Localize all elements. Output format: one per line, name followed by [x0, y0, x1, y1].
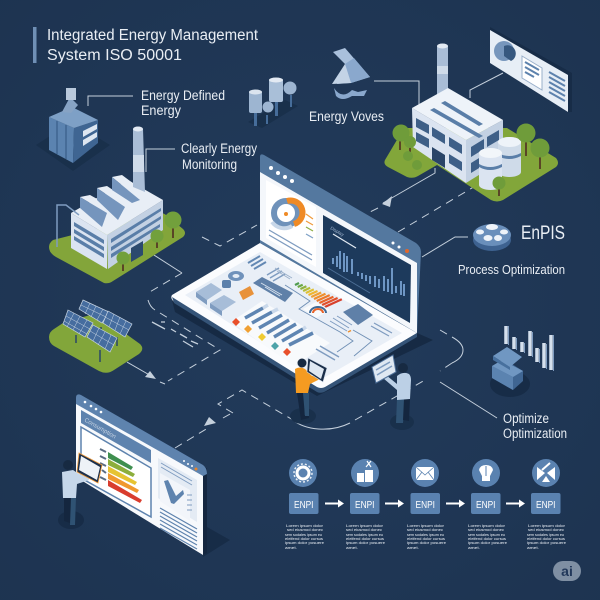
step captions: eleifend dolor cursus	[346, 536, 384, 541]
step captions: Lorem ipsum dolor	[286, 523, 324, 528]
label: clearly energy monitoring: Clearly Energy	[181, 141, 257, 156]
person: blue shirt	[372, 355, 414, 430]
laptop base	[171, 243, 417, 389]
icon: energy moves	[332, 48, 370, 99]
label: energy defined: Energy Defined	[141, 87, 225, 103]
efficiency bars	[108, 452, 142, 503]
step captions: eleifend dolor cursus	[527, 536, 565, 541]
step captions	[285, 523, 567, 550]
label: clearly energy monitoring	[181, 141, 257, 172]
step captions: Lorem ipsum dolor	[346, 523, 384, 528]
base widgets	[196, 256, 392, 366]
title: System ISO 50001	[47, 47, 182, 64]
illustration: solar array	[49, 300, 142, 373]
panel: energy rating screen: Consumption	[83, 418, 117, 440]
arrow 3	[446, 500, 465, 508]
person: orange shirt	[290, 358, 327, 424]
step captions: eleifend dolor cursus	[468, 536, 506, 541]
badge: ai	[553, 561, 581, 581]
rating chart	[81, 427, 151, 517]
step captions: amet.	[527, 545, 539, 550]
panel: gauge	[266, 180, 316, 267]
step captions: sed eiusmod donec	[468, 527, 504, 532]
badge: ai: ai	[561, 563, 573, 579]
label: energy defined	[141, 87, 225, 118]
mini gauge	[303, 302, 330, 318]
panel: dark bar chart	[323, 215, 411, 323]
step 2: ENPI	[355, 499, 374, 511]
icon: cylinders	[248, 78, 298, 128]
laptop dashboard	[171, 154, 433, 396]
spectrum bars	[295, 283, 342, 307]
step captions: ipsum dolor posuere	[285, 540, 325, 545]
step captions: ipsum dolor posuere	[407, 540, 447, 545]
illustration: office plant with tanks	[384, 44, 558, 202]
panel: floating report	[490, 27, 572, 112]
panel: energy rating screen	[76, 394, 230, 557]
step captions: amet.	[468, 545, 480, 550]
step 2	[350, 459, 380, 514]
step captions: eleifend dolor cursus	[407, 536, 445, 541]
step captions: sem sodales ipsum eu	[346, 532, 383, 537]
step 1	[289, 459, 318, 514]
laptop screen	[260, 154, 421, 333]
step 4	[471, 459, 500, 514]
step captions: Lorem ipsum dolor	[407, 523, 445, 528]
small card	[343, 304, 373, 325]
arrow 1	[325, 500, 344, 508]
title: Integrated Energy Management	[47, 27, 259, 44]
arrow 2	[385, 500, 404, 508]
step captions: ipsum dolor posuere	[346, 540, 386, 545]
circuit lines	[285, 285, 372, 356]
process: ENPI steps	[285, 459, 567, 550]
label: EnPIS: EnPIS	[521, 223, 565, 244]
window dots	[269, 166, 400, 248]
step captions: sed eiusmod donec	[407, 527, 443, 532]
side card	[158, 458, 197, 522]
step 3	[410, 459, 440, 514]
step captions: sed eiusmod donec	[346, 527, 382, 532]
label: clearly energy monitoring: Monitoring	[182, 157, 237, 172]
icon: small process glyphs	[152, 322, 198, 347]
label: energy voves: Energy Voves	[309, 108, 384, 124]
step captions: sem sodales ipsum eu	[407, 532, 444, 537]
label: energy defined: Energy	[141, 102, 181, 118]
step captions: amet.	[407, 545, 419, 550]
step captions: ipsum dolor posuere	[527, 540, 567, 545]
icon: blue building	[36, 88, 110, 171]
step captions: sed eiusmod donec	[528, 527, 564, 532]
label: EnPIS	[473, 223, 565, 251]
arrow 4	[506, 500, 525, 508]
illustration: factory with chimney	[49, 126, 185, 283]
step captions: Lorem ipsum dolor	[468, 523, 506, 528]
bar widget	[231, 301, 330, 366]
arrowheads	[145, 196, 392, 426]
title	[33, 27, 259, 64]
step captions: ipsum dolor posuere	[468, 540, 508, 545]
label: process optimization: Process Optimization	[458, 262, 565, 277]
step 1: ENPI	[294, 499, 314, 511]
step captions: sed eiusmod donec	[287, 527, 323, 532]
flow connectors	[88, 73, 503, 448]
label: optimize optimization	[503, 411, 567, 441]
icon: optimize chart and blocks	[490, 326, 554, 397]
step captions: amet.	[346, 545, 358, 550]
step captions: sem sodales ipsum eu	[527, 532, 564, 537]
check mark	[164, 480, 184, 504]
person: with tablet	[58, 453, 102, 529]
step 5	[531, 459, 560, 514]
step captions: amet.	[285, 545, 297, 550]
laptop shadow	[172, 300, 433, 396]
status squares	[232, 318, 240, 326]
panel: dark bar chart: Display	[330, 226, 345, 238]
step captions: sem sodales ipsum eu	[285, 532, 322, 537]
step 3: ENPI	[416, 499, 435, 511]
step 5: ENPI	[536, 499, 556, 511]
label: optimize optimization: Optimize	[503, 411, 549, 426]
step captions: sem sodales ipsum eu	[468, 532, 505, 537]
label: optimize optimization: Optimization	[503, 426, 567, 441]
step 4: ENPI	[476, 499, 496, 511]
step captions: eleifend dolor cursus	[285, 536, 323, 541]
header strip	[81, 410, 151, 463]
step captions: Lorem ipsum dolor	[528, 523, 566, 528]
